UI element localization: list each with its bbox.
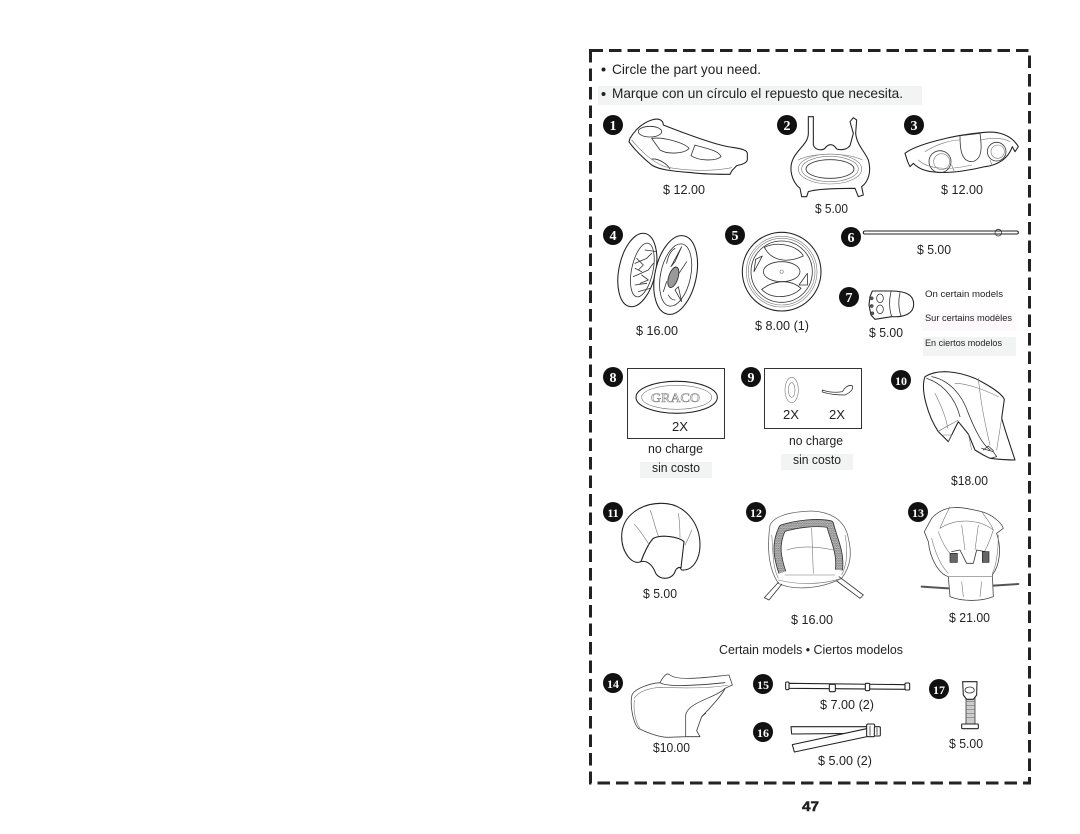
part 5: single wheel: $ 8.00 (1) <box>755 318 809 333</box>
part 17: crotch strap <box>929 679 983 751</box>
part 6: axle rod: $ 5.00 <box>917 242 951 257</box>
part 15: harness strap: 15 <box>757 678 769 692</box>
part 8: Graco badge: GRACO <box>651 390 700 405</box>
part 8: Graco badge: sin costo <box>652 460 700 475</box>
part 5: single wheel <box>725 225 821 333</box>
part 14: seat side pad: $10.00 <box>653 740 690 755</box>
part 17: crotch strap: $ 5.00 <box>949 736 983 751</box>
part 12: seat cover: $ 16.00 <box>791 612 833 627</box>
part 4: wheel pair: 4 <box>610 229 616 244</box>
part 3: tray underside: 3 <box>910 119 918 134</box>
part 15: harness strap <box>753 674 910 712</box>
part 3: tray underside <box>904 115 1018 197</box>
certain models label: Certain models • Ciertos modelos <box>719 642 903 657</box>
part 9: washer and hook <box>741 367 862 470</box>
part 11: head support: 11 <box>607 506 619 520</box>
instructions: Circle the part you need. <box>612 61 761 77</box>
part 1: tray: 1 <box>610 119 616 134</box>
part 12: seat cover: 12 <box>750 506 762 520</box>
part 7: hub cap with model note: $ 5.00 <box>869 325 903 340</box>
part 2: frame bracket: $ 5.00 <box>815 201 848 216</box>
model note <box>923 289 1016 356</box>
part 5: single wheel: 5 <box>732 229 738 244</box>
instructions <box>598 61 922 105</box>
part 8: Graco badge: 8 <box>610 371 616 386</box>
part 11: head support <box>603 502 700 601</box>
part 10: canopy <box>891 370 1015 488</box>
part 13: full seat with harness: $ 21.00 <box>949 610 990 625</box>
part 9: washer and hook: 9 <box>748 371 754 386</box>
part 15: harness strap: $ 7.00 (2) <box>820 697 874 712</box>
part 1: tray: $ 12.00 <box>663 182 705 197</box>
part 8: Graco badge: no charge <box>648 441 703 456</box>
part 2: frame bracket: 2 <box>784 119 790 134</box>
part 12: seat cover <box>746 502 863 627</box>
part 2: frame bracket <box>777 115 870 216</box>
part 1: tray <box>603 115 747 197</box>
part 16: buckle strap: 16 <box>757 726 769 740</box>
part 17: crotch strap: 17 <box>933 683 945 697</box>
part 16: buckle strap <box>753 722 880 768</box>
part 8: Graco badge <box>603 367 724 478</box>
part 13: full seat with harness: 13 <box>912 506 924 520</box>
model note: Sur certains modèles <box>925 313 1012 324</box>
part 9: washer and hook: no charge <box>789 433 843 448</box>
part 4: wheel pair: $ 16.00 <box>636 323 678 338</box>
part 8: Graco badge: 2X <box>672 419 688 434</box>
part 9: washer and hook: 2X <box>783 407 799 422</box>
part 13: full seat with harness <box>908 502 1018 625</box>
part 10: canopy: $18.00 <box>951 473 988 488</box>
part 6: axle rod <box>841 227 1018 257</box>
instructions: Marque con un círculo el repuesto que necesita. <box>612 85 903 101</box>
part 9: washer and hook: 2X <box>829 407 845 422</box>
part 10: canopy: 10 <box>895 374 907 388</box>
part 11: head support: $ 5.00 <box>643 586 677 601</box>
part 6: axle rod: 6 <box>848 231 854 246</box>
page number: 47 <box>802 798 819 814</box>
model note: On certain models <box>925 289 1003 300</box>
part 14: seat side pad <box>603 673 732 755</box>
part 9: washer and hook: sin costo <box>793 452 841 467</box>
part 7: hub cap with model note <box>839 287 1016 356</box>
part 4: wheel pair <box>603 225 704 338</box>
part 3: tray underside: $ 12.00 <box>941 182 983 197</box>
part 16: buckle strap: $ 5.00 (2) <box>818 753 872 768</box>
model note: En ciertos modelos <box>925 338 1002 349</box>
dashed panel border <box>590 50 1030 783</box>
part 14: seat side pad: 14 <box>607 677 619 691</box>
part 7: hub cap with model note: 7 <box>846 291 852 306</box>
